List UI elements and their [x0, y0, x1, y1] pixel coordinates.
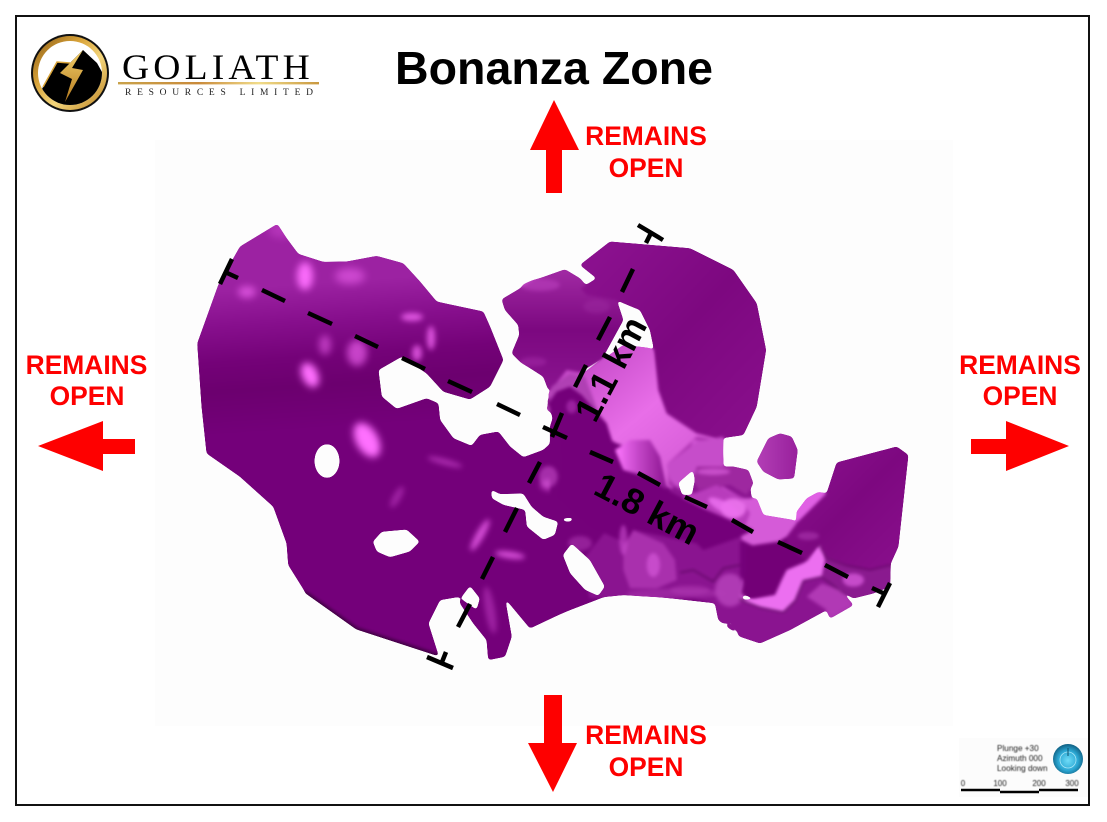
dome — [615, 440, 667, 490]
remains open label: REMAINS — [959, 350, 1081, 380]
lower right complex — [580, 433, 908, 643]
orientation text: Looking down — [997, 764, 1048, 773]
left body highlights — [238, 222, 560, 635]
title: Bonanza Zone — [395, 42, 713, 94]
left arrow and label — [26, 350, 147, 471]
logo wordmark: GOLIATH — [122, 47, 314, 87]
dashed line: 1.8 km width — [220, 259, 890, 607]
dashed line: 1.1 km width — [427, 225, 663, 668]
stem — [667, 437, 723, 490]
small detached blob — [757, 433, 798, 479]
remains open label: OPEN — [609, 752, 683, 782]
orientation sphere — [1053, 744, 1083, 774]
right dark lobe — [787, 447, 908, 569]
scale bar: 200 — [1032, 779, 1046, 788]
dark block — [742, 537, 807, 598]
remains open label: OPEN — [50, 381, 124, 411]
arrow up — [530, 100, 579, 193]
light band — [742, 545, 825, 612]
logo subtitle: RESOURCES LIMITED — [125, 88, 313, 98]
logo gold rule — [118, 82, 319, 84]
right strip — [822, 545, 891, 598]
light strip pieces — [720, 485, 797, 547]
remains open label: REMAINS — [585, 121, 707, 151]
remains open label: OPEN — [983, 381, 1057, 411]
remains open label: OPEN — [609, 153, 683, 183]
central light region — [548, 345, 723, 493]
textured upper knot — [693, 467, 753, 495]
3D model: Bonanza Zone mineralised body — [197, 222, 908, 660]
bottom arrow and label — [528, 695, 707, 792]
lower-left mottled texture — [623, 530, 677, 588]
dark central mass — [539, 373, 753, 598]
orientation text: Plunge +30 — [997, 744, 1039, 753]
scale bar: 300 — [1065, 779, 1079, 788]
remains open label: REMAINS — [585, 720, 707, 750]
label: 1.1 km: 1.1 km — [566, 310, 655, 428]
lower mass — [580, 480, 853, 643]
large upper-right lobe — [580, 242, 766, 438]
orientation text: Azimuth 000 — [997, 754, 1043, 763]
model panel background — [155, 140, 953, 726]
body lower shadow edge — [305, 592, 438, 655]
top arrow and label — [530, 100, 707, 193]
scale bar — [961, 779, 1079, 792]
logo: Goliath Resources Limited — [30, 34, 319, 112]
orientation and scale legend — [959, 738, 1088, 797]
left body — [197, 222, 562, 660]
remains open label: REMAINS — [26, 350, 147, 380]
logo emblem — [30, 34, 112, 112]
arrow left — [38, 421, 135, 471]
arrow down — [528, 695, 577, 792]
arrow right — [971, 421, 1069, 471]
scale bar: 0 — [961, 779, 966, 788]
label: 1.8 km: 1.8 km — [588, 464, 706, 553]
right arrow and label — [959, 350, 1081, 471]
scale bar: 100 — [993, 779, 1007, 788]
dark edges — [739, 577, 853, 612]
centre base mass — [548, 394, 752, 618]
upper-left lobe — [502, 269, 623, 390]
